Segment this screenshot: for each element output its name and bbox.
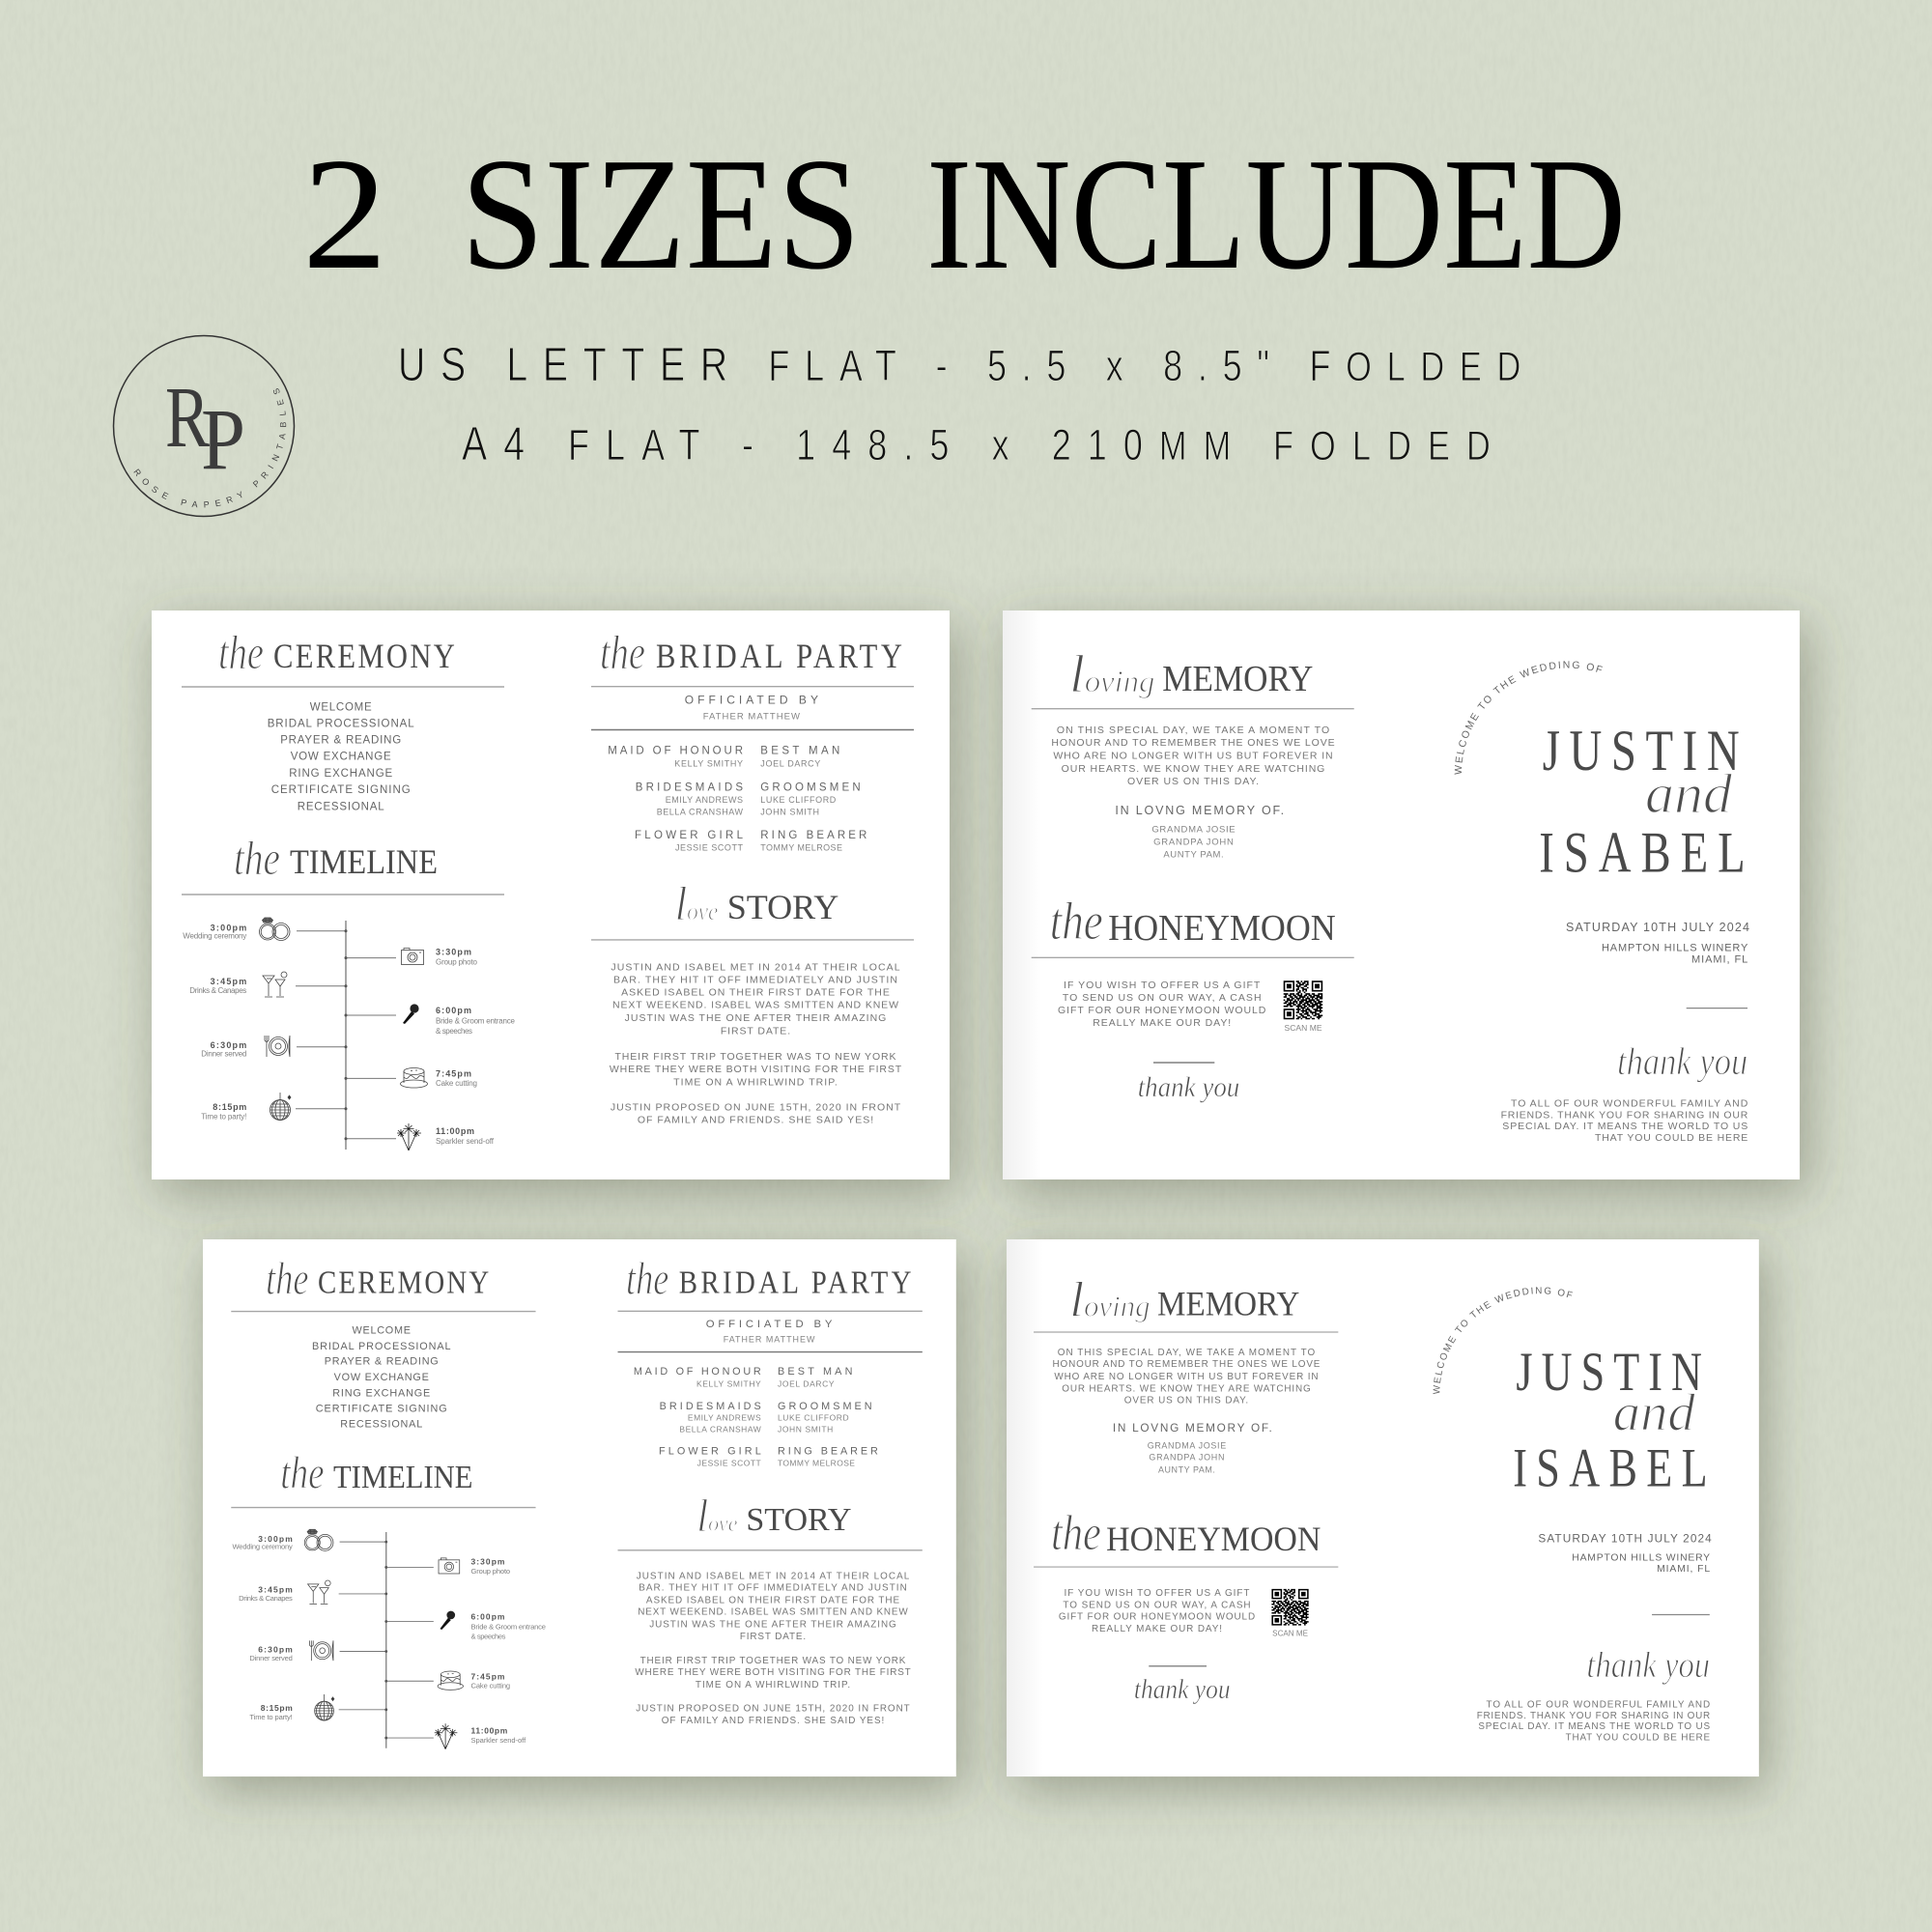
bridal party names: EMILY ANDREWS — [688, 1413, 761, 1423]
ceremony order list: PRAYER & READING — [280, 734, 401, 746]
QR code — [1284, 980, 1322, 1033]
bridal party names: MAID OF HONOUR — [634, 1366, 761, 1378]
timeline chart: Bride & Groom entrance — [471, 1623, 546, 1632]
officiant block: FATHER MATTHEW — [703, 712, 800, 723]
bridal party names: TOMMY MELROSE — [778, 1459, 855, 1468]
honeymoon gift text: GIFT FOR OUR HONEYMOON WOULD — [1058, 1005, 1266, 1016]
ceremony order list: CERTIFICATE SIGNING — [316, 1403, 447, 1414]
love story text: ASKED ISABEL ON THEIR FIRST DATE FOR THE — [646, 1595, 899, 1605]
love story text: JUSTIN AND ISABEL MET IN 2014 AT THEIR LOCAL — [637, 1571, 910, 1581]
date and venue: HAMPTON HILLS WINERY — [1572, 1553, 1710, 1564]
timeline chart: 11:00pm — [436, 1126, 474, 1136]
bridal party names: TOMMY MELROSE — [760, 843, 842, 853]
thank you note: thank you — [1617, 1039, 1747, 1083]
title: 2 — [302, 125, 387, 302]
heading: the timeline: the — [280, 1449, 325, 1499]
thank you note — [1501, 1009, 1748, 1144]
bridal party names: BELLA CRANSHAW — [679, 1425, 761, 1435]
timeline chart: 7:45pm — [436, 1068, 471, 1078]
heading: loving memory — [1032, 644, 1354, 709]
arched welcome text: WELCOME TO THE WEDDING OF — [1433, 1287, 1573, 1395]
ceremony order list: CERTIFICATE SIGNING — [271, 784, 411, 796]
timeline chart: 3:00pm — [258, 1534, 293, 1544]
heading: the ceremony: CEREMONY — [273, 638, 455, 676]
couple names — [1539, 719, 1746, 885]
logo: Rose Papery Printables: P — [201, 392, 245, 488]
memorial text — [1051, 724, 1335, 861]
heading: the honeymoon — [1034, 1506, 1338, 1567]
heading: loving memory: MEMORY — [1162, 659, 1313, 699]
love story text: FIRST DATE. — [740, 1632, 806, 1642]
timeline chart — [232, 1529, 546, 1749]
memorial text: OVER US ON THIS DAY. — [1127, 776, 1259, 787]
bridal party names: GROOMSMEN — [778, 1401, 872, 1412]
officiant block: OFFICIATED BY — [706, 1319, 833, 1330]
ceremony order list: RECESSIONAL — [340, 1419, 422, 1431]
love story text: THEIR FIRST TRIP TOGETHER WAS TO NEW YORK — [640, 1656, 906, 1666]
heading: the ceremony: the — [218, 625, 264, 679]
date and venue: HAMPTON HILLS WINERY — [1602, 942, 1748, 953]
thank you sign-off: thank you — [1134, 1675, 1231, 1705]
timeline chart: 3:30pm — [436, 947, 471, 956]
bridal party names: FLOWER GIRL — [635, 830, 744, 841]
memorial text: AUNTY PAM. — [1158, 1464, 1215, 1474]
bridal party names: KELLY SMITHY — [674, 759, 743, 769]
panel: US letter inside spread — [152, 611, 950, 1179]
date and venue: SATURDAY 10TH JULY 2024 — [1538, 1531, 1712, 1545]
timeline chart: Time to party! — [249, 1713, 293, 1721]
thank you note: THAT YOU COULD BE HERE — [1595, 1132, 1747, 1144]
love story text: NEXT WEEKEND. ISABEL WAS SMITTEN AND KNEW — [638, 1607, 908, 1618]
honeymoon gift text — [1058, 980, 1266, 1029]
timeline chart: Sparkler send-off — [471, 1736, 526, 1745]
heading: the bridal party: BRIDAL PARTY — [656, 638, 902, 675]
timeline chart: 3:45pm — [258, 1584, 293, 1594]
honeymoon gift text: TO SEND US ON OUR WAY, A CASH — [1063, 992, 1262, 1004]
timeline chart: 8:15pm — [213, 1102, 246, 1112]
ceremony order list: PRAYER & READING — [325, 1356, 439, 1368]
love story text: WHERE THEY WERE BOTH VISITING FOR THE FIRST — [610, 1064, 902, 1075]
memorial text: WHO ARE NO LONGER WITH US BUT FOREVER IN — [1053, 750, 1333, 761]
thank you note: FRIENDS. THANK YOU FOR SHARING IN OUR — [1477, 1711, 1710, 1721]
heading: the bridal party: the — [626, 1255, 668, 1305]
ceremony order list: WELCOME — [353, 1325, 411, 1337]
heading: love story — [618, 1492, 923, 1550]
date and venue: SATURDAY 10TH JULY 2024 — [1566, 921, 1749, 934]
love story text: OF FAMILY AND FRIENDS. SHE SAID YES! — [662, 1716, 884, 1726]
bridal party names: KELLY SMITHY — [696, 1379, 761, 1389]
bridal party names: JESSIE SCOTT — [697, 1459, 761, 1468]
bridal party names: EMILY ANDREWS — [666, 795, 743, 805]
arched welcome text: WELCOME TO THE WEDDING OF — [1455, 661, 1603, 775]
ceremony order list: VOW EXCHANGE — [334, 1372, 429, 1383]
ceremony order list: BRIDAL PROCESSIONAL — [312, 1341, 450, 1352]
memorial text: WHO ARE NO LONGER WITH US BUT FOREVER IN — [1054, 1372, 1319, 1382]
memorial text: IN LOVNG MEMORY OF. — [1115, 804, 1284, 817]
heading: loving memory: loving — [1069, 1272, 1150, 1327]
bridal party names: MAID OF HONOUR — [608, 746, 743, 757]
memorial text: IN LOVNG MEMORY OF. — [1113, 1421, 1272, 1435]
love story text: TIME ON A WHIRLWIND TRIP. — [696, 1680, 850, 1690]
timeline chart: Dinner served — [249, 1654, 293, 1662]
heading: the timeline — [182, 831, 504, 895]
officiant block: OFFICIATED BY — [685, 694, 818, 707]
timeline chart: Wedding ceremony — [183, 932, 246, 941]
memorial text: AUNTY PAM. — [1163, 850, 1224, 861]
heading: loving memory: loving — [1069, 644, 1154, 703]
memorial text: ON THIS SPECIAL DAY, WE TAKE A MOMENT TO — [1058, 1348, 1315, 1358]
timeline chart: Drinks & Canapes — [239, 1594, 293, 1603]
love story text: JUSTIN PROPOSED ON JUNE 15TH, 2020 IN FRONT — [636, 1704, 910, 1715]
heading: the bridal party — [591, 625, 914, 687]
timeline chart: 3:00pm — [211, 923, 246, 933]
bridal party names: JOHN SMITH — [760, 807, 819, 816]
thank you sign-off: thank you — [1138, 1071, 1239, 1103]
thank you note: FRIENDS. THANK YOU FOR SHARING IN OUR — [1501, 1109, 1748, 1121]
date and venue — [1566, 921, 1749, 966]
title — [302, 125, 1626, 302]
timeline chart: 11:00pm — [471, 1726, 508, 1736]
heading: the bridal party — [618, 1255, 923, 1311]
timeline chart — [183, 918, 516, 1151]
heading: the honeymoon: HONEYMOON — [1106, 1520, 1321, 1558]
bridal party names: BEST MAN — [778, 1366, 852, 1378]
ceremony order list: RING EXCHANGE — [289, 768, 393, 780]
subtitle: US letter size: US LETTER FLAT - 5.5 x 8.5" F OLDED — [398, 339, 1520, 391]
love story text — [635, 1571, 911, 1726]
love story text: JUSTIN WAS THE ONE AFTER THEIR AMAZING — [649, 1619, 896, 1630]
timeline chart: Time to party! — [201, 1112, 246, 1121]
heading: the timeline: TIMELINE — [333, 1460, 472, 1495]
bridal party names — [608, 746, 867, 853]
love story text: WHERE THEY WERE BOTH VISITING FOR THE FIRST — [635, 1667, 911, 1678]
timeline chart: Dinner served — [201, 1050, 246, 1059]
thank you note: TO ALL OF OUR WONDERFUL FAMILY AND — [1487, 1700, 1710, 1711]
heading: the timeline — [231, 1449, 536, 1508]
title: SIZES — [461, 125, 861, 302]
memorial text: HONOUR AND TO REMEMBER THE ONES WE LOVE — [1053, 1359, 1321, 1370]
timeline chart: Sparkler send-off — [436, 1137, 495, 1146]
couple names: and — [1645, 762, 1733, 825]
ceremony order list: BRIDAL PROCESSIONAL — [268, 719, 414, 730]
heading: the honeymoon: the — [1051, 1506, 1101, 1561]
bridal party names: JOEL DARCY — [760, 759, 820, 769]
love story text: OF FAMILY AND FRIENDS. SHE SAID YES! — [638, 1115, 873, 1126]
logo: Rose Papery Printables: ROSE PAPERY PRINTABLES — [133, 388, 286, 508]
title: INCLUDED — [926, 125, 1626, 302]
heading: love story: love — [696, 1492, 738, 1542]
heading: the ceremony: the — [266, 1255, 309, 1305]
heading: the ceremony: CEREMONY — [318, 1264, 489, 1300]
logo: Rose Papery Printables: R — [165, 370, 210, 466]
thank you note — [1477, 1615, 1710, 1743]
memorial text — [1053, 1348, 1321, 1474]
ceremony order list — [312, 1325, 450, 1431]
memorial text: OVER US ON THIS DAY. — [1124, 1396, 1248, 1406]
timeline chart: 6:00pm — [471, 1612, 505, 1622]
bridal party names: JOEL DARCY — [778, 1379, 835, 1389]
love story text: JUSTIN WAS THE ONE AFTER THEIR AMAZING — [625, 1012, 886, 1024]
bridal party names: GROOMSMEN — [760, 781, 861, 793]
thank you note: SPECIAL DAY. IT MEANS THE WORLD TO US — [1502, 1121, 1747, 1132]
love story text: JUSTIN AND ISABEL MET IN 2014 AT THEIR LOCAL — [611, 961, 900, 973]
heading: loving memory: MEMORY — [1157, 1284, 1299, 1322]
heading: the bridal party: the — [600, 625, 645, 679]
timeline chart: 3:45pm — [211, 977, 246, 986]
bridal party names: FLOWER GIRL — [659, 1446, 761, 1458]
thank you note: TO ALL OF OUR WONDERFUL FAMILY AND — [1511, 1097, 1748, 1109]
thank you note: SPECIAL DAY. IT MEANS THE WORLD TO US — [1478, 1721, 1710, 1732]
love story text: FIRST DATE. — [721, 1026, 790, 1037]
bridal party names — [634, 1366, 878, 1468]
ceremony order list: RECESSIONAL — [298, 801, 384, 812]
QR code: SCAN ME — [1272, 1630, 1308, 1638]
memorial text: GRANDPA JOHN — [1149, 1453, 1224, 1463]
love story text: TIME ON A WHIRLWIND TRIP. — [673, 1076, 838, 1088]
couple names: and — [1613, 1382, 1695, 1441]
officiant block — [591, 694, 914, 730]
heading: love story: STORY — [727, 888, 838, 926]
memorial text: OUR HEARTS. WE KNOW THEY ARE WATCHING — [1062, 763, 1324, 775]
timeline chart: Wedding ceremony — [232, 1543, 293, 1551]
couple names: JUSTIN — [1516, 1342, 1702, 1402]
officiant block — [618, 1319, 923, 1352]
officiant block: FATHER MATTHEW — [724, 1334, 815, 1344]
heading: the timeline: the — [234, 831, 280, 885]
timeline chart: Group photo — [471, 1567, 510, 1576]
bridal party names: JESSIE SCOTT — [675, 843, 744, 853]
panel: US letter outside spread — [984, 597, 1834, 1219]
honeymoon gift text: GIFT FOR OUR HONEYMOON WOULD — [1059, 1612, 1255, 1623]
bridal party names: BELLA CRANSHAW — [657, 807, 744, 816]
heading: love story — [591, 876, 914, 940]
heading: love story: love — [675, 876, 718, 930]
couple names: JUSTIN — [1543, 719, 1740, 783]
bridal party names: BEST MAN — [760, 746, 839, 757]
timeline chart: Cake cutting — [436, 1079, 477, 1088]
bridal party names: LUKE CLIFFORD — [778, 1413, 849, 1423]
QR code: SCAN ME — [1285, 1023, 1322, 1033]
heading: love story: STORY — [746, 1502, 851, 1538]
love story text: ASKED ISABEL ON THEIR FIRST DATE FOR THE — [621, 987, 890, 999]
panel: A4 outside spread — [989, 1227, 1791, 1814]
honeymoon gift text: TO SEND US ON OUR WAY, A CASH — [1063, 1600, 1251, 1610]
logo: Rose Papery Printables — [112, 334, 296, 518]
honeymoon gift text — [1059, 1588, 1255, 1634]
thank you note: THAT YOU COULD BE HERE — [1566, 1732, 1710, 1743]
honeymoon gift text: REALLY MAKE OUR DAY! — [1093, 1017, 1231, 1029]
love story text: THEIR FIRST TRIP TOGETHER WAS TO NEW YORK — [614, 1051, 896, 1063]
date and venue — [1538, 1531, 1712, 1575]
memorial text: GRANDMA JOSIE — [1148, 1440, 1226, 1450]
heading: the ceremony — [182, 625, 504, 687]
love story text: NEXT WEEKEND. ISABEL WAS SMITTEN AND KNEW — [612, 1000, 898, 1011]
bridal party names: LUKE CLIFFORD — [760, 795, 837, 805]
panel: A4 inside spread — [203, 1239, 956, 1776]
timeline chart: 6:00pm — [436, 1006, 471, 1015]
memorial text: GRANDPA JOHN — [1153, 837, 1234, 847]
love story text — [610, 961, 902, 1126]
bridal party names: RING BEARER — [778, 1446, 878, 1458]
memorial text: OUR HEARTS. WE KNOW THEY ARE WATCHING — [1062, 1383, 1311, 1394]
ceremony order list: WELCOME — [310, 701, 372, 713]
heading: the honeymoon: HONEYMOON — [1108, 908, 1336, 949]
subtitle: A4 size: A4 FLAT - 148.5 x 210 MM F OLDED — [462, 418, 1491, 470]
heading: the ceremony — [231, 1255, 536, 1312]
heading: the timeline: TIMELINE — [290, 842, 438, 881]
love story text: BAR. THEY HIT IT OFF IMMEDIATELY AND JUSTIN — [639, 1583, 907, 1594]
honeymoon gift text: REALLY MAKE OUR DAY! — [1092, 1624, 1222, 1634]
timeline chart: Drinks & Canapes — [189, 986, 246, 995]
heading: the honeymoon — [1032, 892, 1354, 957]
timeline chart: Cake cutting — [471, 1681, 510, 1690]
QR code — [1271, 1589, 1309, 1638]
timeline chart: 7:45pm — [471, 1671, 505, 1681]
timeline chart: & speeches — [471, 1632, 506, 1640]
timeline chart: 6:30pm — [211, 1040, 246, 1050]
thank you note: thank you — [1586, 1645, 1710, 1686]
timeline chart: 8:15pm — [261, 1703, 293, 1713]
heading: the bridal party: BRIDAL PARTY — [679, 1264, 911, 1300]
bridal party names: BRIDESMAIDS — [660, 1401, 761, 1412]
couple names: ISABEL — [1513, 1437, 1708, 1498]
memorial text: ON THIS SPECIAL DAY, WE TAKE A MOMENT TO — [1057, 724, 1329, 736]
timeline chart: 3:30pm — [471, 1557, 505, 1567]
timeline chart: 6:30pm — [258, 1645, 293, 1655]
bridal party names: BRIDESMAIDS — [636, 781, 743, 793]
bridal party names: RING BEARER — [760, 830, 867, 841]
honeymoon gift text: IF YOU WISH TO OFFER US A GIFT — [1064, 980, 1261, 991]
memorial text: GRANDMA JOSIE — [1151, 824, 1236, 835]
ceremony order list — [268, 701, 414, 812]
date and venue: MIAMI, FL — [1691, 954, 1747, 966]
ceremony order list: VOW EXCHANGE — [291, 752, 391, 763]
love story text: BAR. THEY HIT IT OFF IMMEDIATELY AND JUSTIN — [613, 974, 897, 985]
heading: loving memory — [1034, 1272, 1338, 1332]
couple names — [1513, 1342, 1708, 1498]
love story text: JUSTIN PROPOSED ON JUNE 15TH, 2020 IN FRONT — [611, 1102, 901, 1114]
bridal party names: JOHN SMITH — [778, 1425, 833, 1435]
ceremony order list: RING EXCHANGE — [332, 1387, 430, 1399]
timeline chart: & speeches — [436, 1027, 472, 1036]
memorial text: HONOUR AND TO REMEMBER THE ONES WE LOVE — [1051, 737, 1335, 749]
honeymoon gift text: IF YOU WISH TO OFFER US A GIFT — [1065, 1588, 1249, 1599]
timeline chart: Bride & Groom entrance — [436, 1017, 516, 1026]
date and venue: MIAMI, FL — [1657, 1564, 1710, 1575]
timeline chart: Group photo — [436, 957, 478, 966]
heading: the honeymoon: the — [1050, 892, 1103, 951]
couple names: ISABEL — [1539, 820, 1746, 885]
